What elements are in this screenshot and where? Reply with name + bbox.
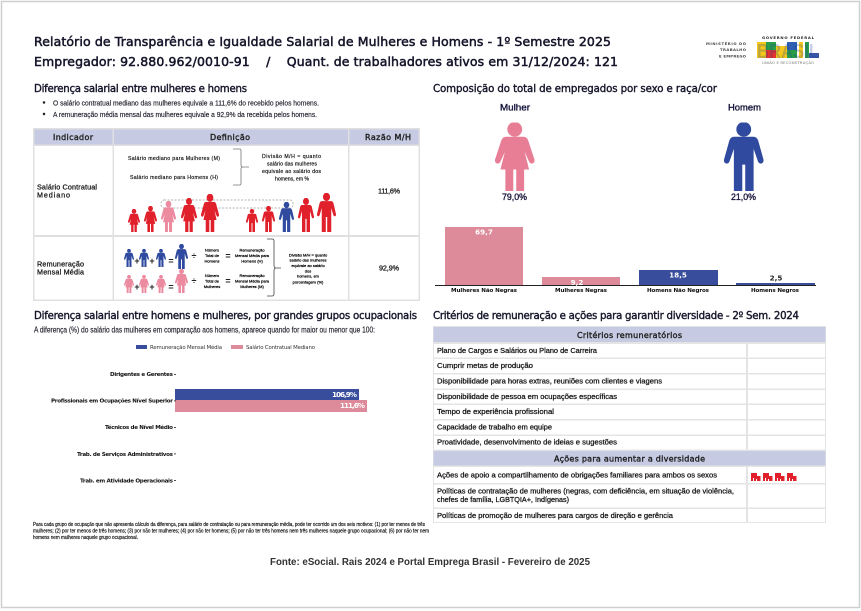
bullet list: A remuneração média mensal das mulheres equivale a 92,9% da recebida pelos homens. [53, 110, 317, 119]
bar chart: grupos ocupacionais: Técnicos de Nível Médio [105, 424, 173, 431]
table rows: Proatividade, desenvolvimento de ideias e sugestões [437, 438, 617, 446]
bar chart: grupos ocupacionais: Dirigentes e Gerentes [110, 372, 174, 378]
row: remuneração mensal média: Mensal Média [37, 268, 84, 276]
equation text: Total de [205, 278, 220, 284]
bar chart: composição por raça: Mulheres Não Negras [451, 288, 518, 294]
bullet list: O salário contratual mediano das mulheres equivale a 111,6% do recebido pelos homens. [53, 98, 319, 108]
pictogram: mulher: Mulher [500, 102, 530, 112]
logo: governo federal: BRASIL [757, 41, 819, 63]
table rows: Políticas de contratação de mulheres (negras, com deficiência, em situação de violência, [437, 486, 734, 496]
operators: = [168, 282, 174, 292]
table header: Razão M/H [365, 133, 411, 142]
table rows: Tempo de experiência profissional [437, 407, 554, 416]
equation text: Divisão M/H = quanto [289, 252, 328, 258]
table rows: Capacidade de trabalho em equipe [437, 422, 552, 432]
bar chart: grupos ocupacionais: Profissionais em Ocupações Nível Superior [51, 398, 173, 404]
operators: ÷ [192, 251, 197, 261]
table header: Indicador [53, 133, 94, 142]
pictogram row men [246, 193, 336, 232]
logo: governo federal: UNIÃO E RECONSTRUÇÃO [762, 60, 814, 65]
logo: governo federal: TRABALHO [720, 47, 747, 52]
row: remuneração mensal média: 92,9% [379, 264, 400, 272]
equation text: equivale ao salário [291, 263, 325, 268]
title: Empregador: 92.880.962/0010-91 / Quant. de trabalhadores ativos em 31/12/2024: 121 [34, 54, 618, 69]
bar chart: grupos ocupacionais: 106,9% [332, 390, 357, 399]
row: salário contratual mediano: Divisão M/H = quanto [262, 154, 321, 160]
panel: criteria table [433, 326, 826, 523]
legend: Remuneração Mensal Média [150, 344, 222, 351]
operators: + [149, 282, 155, 292]
bar chart: composição por raça: 9,2 [571, 278, 583, 287]
row: salário contratual mediano [37, 154, 401, 200]
row: salário contratual mediano: homens, em % [275, 176, 309, 182]
bar chart: composição por raça [435, 227, 816, 294]
bar chart: composição por raça: Mulheres Negras [555, 288, 608, 294]
subheading: A diferença (%) do salário das mulheres em comparação aos homens, aparece quando for maior ou menor que 100: [34, 324, 375, 334]
source line: Fonte: eSocial. Rais 2024 e Portal Emprega Brasil - Fevereiro de 2025 [270, 556, 590, 568]
pictogram: homem [724, 102, 764, 202]
pictogram equation women [124, 269, 188, 293]
equation text: Mensal Média para [235, 253, 270, 258]
equation text [204, 248, 328, 289]
heading: critérios: Critérios de remuneração e ações para garantir diversidade - 2º Sem. 2024 [433, 310, 799, 322]
pictogram row women [128, 194, 219, 232]
logo: governo federal: E EMPREGO [719, 54, 747, 58]
legend: Salário Contratual Mediano [246, 344, 315, 351]
equation text: Remuneração [239, 248, 265, 252]
bar chart: composição por raça: 69,7 [475, 228, 493, 236]
table header [53, 133, 411, 142]
operators: + [134, 256, 140, 266]
row: salário contratual mediano: Salário mediano para Homens (H) [130, 175, 218, 181]
logo: governo federal: GOVERNO FEDERAL [762, 35, 815, 40]
equation text: Homens [205, 258, 219, 264]
dashed highlight [161, 200, 293, 208]
equation text: dos [305, 268, 311, 273]
equation text: homens, em [297, 274, 320, 278]
bar chart: composição por raça: 2,5 [770, 274, 782, 282]
footnote: Para cada grupo de ocupação que não apresenta cálculo da diferença, para salário de contratação ou para remuneração média, pode ter ocorrido um dos seis motivos: (1) por ter menos de três [33, 522, 425, 528]
equation text: Mulheres [204, 284, 220, 289]
table rows: Políticas de promoção de mulheres para cargos de direção e gerência [437, 511, 673, 520]
equation text: porcentagem (%) [293, 280, 324, 284]
icons: ações adotadas [751, 473, 796, 481]
bar chart: grupos ocupacionais: 111,6% [340, 401, 365, 410]
row: salário contratual mediano: Salário Contratual [37, 182, 97, 192]
footnote: homens nem mulheres naquele grupo ocupacional. [33, 535, 138, 541]
table header: Definição [210, 133, 250, 142]
equation text: Remuneração [239, 273, 265, 278]
equation text: Número [205, 273, 220, 278]
equation text: Mensal Média para [235, 278, 270, 284]
row: salário contratual mediano: Mediano [37, 190, 70, 200]
table rows: Ações de apoio a compartilhamento de obrigações familiares para ambos os sexos [437, 470, 717, 480]
row: salário contratual mediano: 111,6% [378, 186, 401, 196]
pictogram: mulher: 79,0% [502, 192, 527, 202]
legend [136, 344, 315, 351]
equation text: Mulheres (M) [240, 284, 264, 289]
table rows: Disponibilidade para horas extras, reuniões com clientes e viagens [437, 376, 662, 386]
equation text: Homens (H) [241, 258, 263, 264]
footnote: mulheres; (2) por ter menos de três homens; (3) por não ter mulheres; (4) por não ter homens; (5) por não ter três homens nem três mulheres naquele grupo ocupacional; (6) por não ter nem [33, 528, 429, 534]
row: salário contratual mediano: equivale ao salário dos [262, 169, 321, 175]
table rows: Cumprir metas de produção [437, 361, 533, 370]
operators: = [168, 256, 174, 266]
equation text: Total de [205, 253, 220, 258]
pictogram: homem: Homem [728, 102, 761, 112]
operators: = [225, 276, 231, 286]
bar chart: composição por raça: Homens Não Negros [647, 288, 710, 294]
bullet list [43, 98, 319, 119]
heading: diferença salarial: Diferença salarial entre mulheres e homens [34, 84, 247, 95]
title: Relatório de Transparência e Igualdade Salarial de Mulheres e Homens - 1º Semestre 2025 [34, 34, 611, 49]
row: salário contratual mediano: salário das mulheres [267, 162, 317, 168]
bar chart: composição por raça: 18,5 [669, 270, 687, 280]
bar chart: grupos ocupacionais [51, 372, 367, 484]
pictogram: homem: 21,0% [731, 192, 756, 202]
table section headers: Ações para aumentar a diversidade [554, 454, 705, 464]
table rows: Plano de Cargos e Salários ou Plano de Carreira [437, 346, 597, 355]
table section headers: Critérios remuneratórios [577, 330, 682, 340]
operators: + [149, 256, 155, 266]
table rows: Disponibilidade de pessoa em ocupações específicas [437, 392, 617, 401]
bar chart: grupos ocupacionais: Trab. em Atividade Operacionais [80, 478, 174, 484]
table rows [437, 346, 734, 520]
operators [134, 251, 231, 292]
row: remuneração mensal média [37, 260, 400, 276]
heading: grupos ocupacionais: Diferença salarial entre homens e mulheres, por grandes grupos ocupacionais [34, 311, 417, 322]
bar chart: composição por raça: Homens Negros [751, 288, 800, 294]
row: salário contratual mediano: Salário mediano para Mulheres (M) [128, 156, 220, 162]
table rows: chefes de família, LGBTQIA+, Indígenas) [437, 495, 569, 504]
row: remuneração mensal média: Remuneração [37, 260, 84, 268]
footnote [33, 522, 429, 541]
bracket row 2 [267, 239, 281, 296]
operators: = [225, 251, 231, 261]
title [34, 34, 618, 69]
panel: indicator table [33, 128, 420, 301]
table section headers [554, 330, 705, 464]
heading: composição: Composição do total de empregados por sexo e raça/cor [433, 84, 718, 95]
equation text: salário das mulheres [290, 258, 326, 263]
bracket row 1 [233, 149, 249, 185]
pictogram: mulher [495, 102, 535, 202]
operators: + [134, 282, 140, 292]
logo: governo federal: MINISTÉRIO DO [706, 41, 747, 46]
pictogram equation men [124, 244, 188, 269]
operators: ÷ [192, 276, 197, 286]
equation text: Número [205, 248, 220, 252]
bar chart: grupos ocupacionais: Trab. de Serviços Administrativos [77, 452, 174, 458]
logo: governo federal [706, 35, 819, 65]
